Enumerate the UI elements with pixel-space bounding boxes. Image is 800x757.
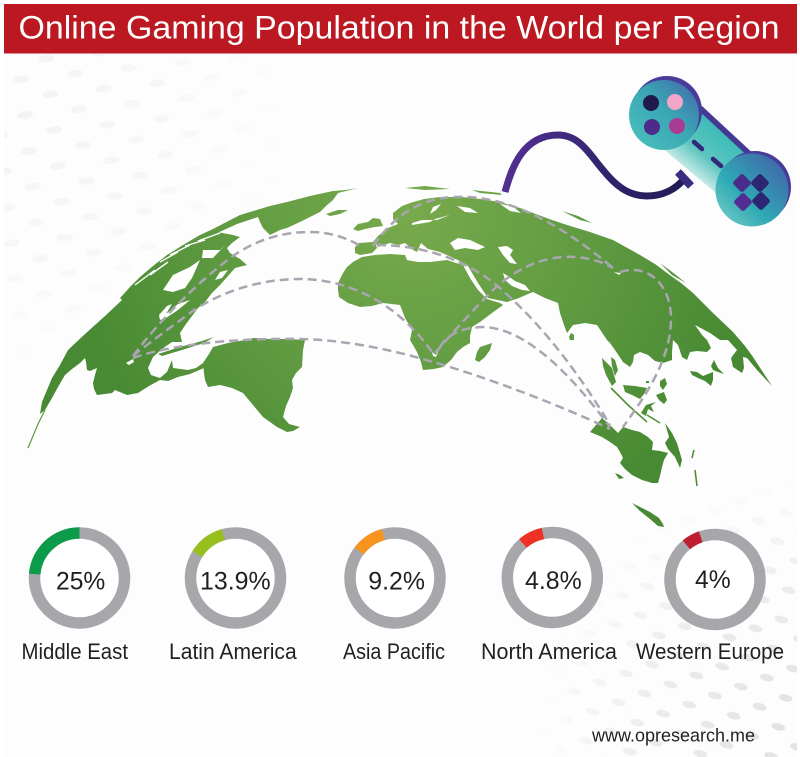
sliver: Aleutian arc (28, 410, 45, 448)
select and start buttons (694, 142, 721, 166)
islands (326, 186, 724, 527)
controller connector (678, 172, 691, 186)
island: Malay peninsula (611, 357, 618, 376)
label: North America: North America (481, 639, 618, 664)
island: Cuba strip (158, 337, 214, 356)
source url: www.opresearch.me (591, 726, 755, 746)
island: Madagascar (475, 343, 492, 362)
island: Australia (590, 418, 668, 483)
continent: Arctic Canada strip and Greenland (200, 188, 358, 235)
donut: Western Europe 4% (670, 534, 760, 624)
donut: Latin America 13.9%: 13.9% (200, 567, 271, 595)
island: Arctic north Russia (405, 186, 450, 190)
island: Tasmania (615, 473, 624, 479)
donut: Asia Pacific 9.2% (350, 533, 440, 623)
water: inland seas and coasts (126, 204, 624, 365)
continent: Africa (338, 254, 503, 370)
continent: South America (203, 338, 305, 432)
island: Philippines (660, 378, 667, 390)
directional pad (732, 173, 771, 212)
world map (28, 186, 772, 527)
island: Sri Lanka (569, 333, 574, 340)
island chain: Java and thin arcs (611, 388, 697, 486)
island: New Zealand (632, 503, 664, 527)
label: Latin America: Latin America (169, 639, 297, 664)
title banner: Online Gaming Population in the World per Region (18, 10, 779, 46)
donut: North America 4.8%: 4.8% (525, 567, 582, 595)
donut: Latin America 13.9% (190, 533, 280, 623)
island: Borneo (623, 385, 647, 399)
label: Asia Pacific: Asia Pacific (343, 639, 445, 664)
island: Sulawesi (641, 402, 656, 416)
island: Sumatra (602, 358, 616, 386)
arctic channels (135, 233, 220, 285)
controller body (629, 76, 791, 226)
donut: Middle East 25% (34, 533, 124, 623)
donut: North America 4.8% (507, 532, 597, 622)
donut: Asia Pacific 9.2%: 9.2% (368, 567, 425, 595)
continent: North and Central America (40, 232, 247, 414)
title banner (4, 4, 797, 54)
island: New Guinea (665, 423, 682, 468)
donut: Western Europe 4%: 4% (695, 566, 731, 594)
label: Western Europe: Western Europe (636, 639, 784, 664)
donut: Middle East 25%: 25% (56, 567, 105, 595)
controller cable (505, 135, 684, 196)
action buttons (643, 94, 685, 135)
label: Middle East: Middle East (22, 639, 128, 664)
island: Japan group (690, 371, 713, 386)
icon: game controller (505, 76, 791, 226)
continent: Eurasia (355, 197, 772, 386)
island: Iceland and UK (326, 210, 348, 216)
dashed connection routes (133, 197, 671, 429)
